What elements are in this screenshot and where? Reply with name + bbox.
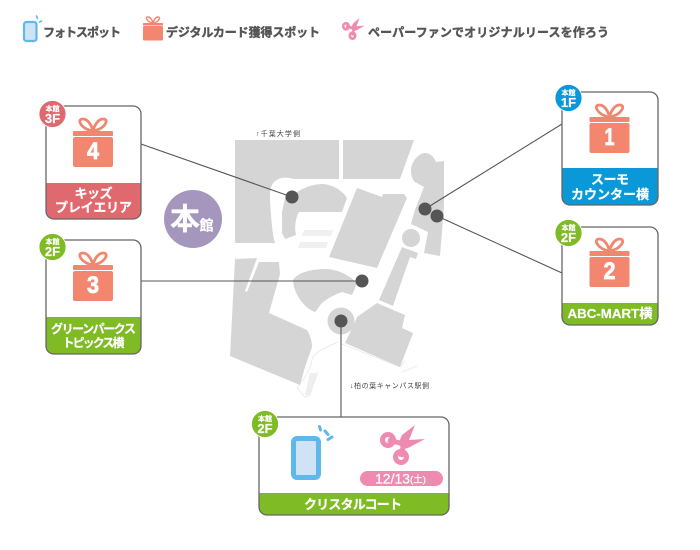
badge: main 2F: 本館 <box>46 237 60 246</box>
date pill <box>360 470 443 486</box>
label: green park topics: グリーンパークス <box>51 321 136 336</box>
icon: gift legend <box>143 17 163 40</box>
legend label: paper fan: ペーパーファンでオリジナルリースを作ろう <box>368 24 609 40</box>
legend label: digital card spot: デジタルカード獲得スポット <box>166 24 320 40</box>
label: crystal court: クリスタルコート <box>304 497 402 512</box>
badge: main 2F <box>39 234 66 260</box>
card: spot 4 kids play area <box>39 100 141 219</box>
badge: main 2F bottom: 2F <box>257 421 273 436</box>
date pill: (土) <box>410 474 426 486</box>
label: green park topics: トピックス横 <box>62 335 124 350</box>
label: green park topics <box>51 321 136 350</box>
map: east rotunda <box>402 229 420 247</box>
map: lower right block <box>345 303 413 367</box>
label: kids play area <box>55 186 132 215</box>
card: crystal court <box>252 410 449 515</box>
map: courtyard inner block <box>282 184 347 239</box>
badge: main 2F bottom: 本館 <box>258 414 272 423</box>
map: central building <box>329 188 407 268</box>
building badge: main hall: 館 <box>200 218 214 234</box>
badge: main 2F bottom <box>252 410 278 438</box>
icon: phone legend <box>24 16 42 41</box>
badge: main 1F <box>555 84 582 112</box>
map: crystal court circle <box>328 308 354 334</box>
badge: main 2F: 2F <box>45 244 60 259</box>
building badge: main hall <box>164 190 222 248</box>
label: zoomo counter: カウンター横 <box>571 187 649 202</box>
badge: main 1F: 1F <box>561 95 576 110</box>
label: kids play area: プレイエリア <box>55 200 132 215</box>
badge: main 2F right: 本館 <box>562 223 576 232</box>
map: long building <box>379 247 418 306</box>
badge: main 3F <box>39 100 66 128</box>
label: abc-mart: ABC-MART横 <box>568 306 652 321</box>
card: spot 1 zoomo <box>555 84 658 205</box>
legend label: photo spot: フォトスポット <box>43 26 121 40</box>
map: entrance hatch <box>305 373 318 395</box>
map: upper left block <box>235 140 339 243</box>
building badge: main hall: 本 <box>170 204 200 236</box>
icon: gift 4: 4 <box>87 138 100 165</box>
map: plaza outline <box>297 342 417 397</box>
map markers <box>286 190 444 328</box>
icon: scissors <box>382 425 425 462</box>
floor map <box>230 140 444 397</box>
badge: main 2F right <box>555 220 582 246</box>
label: zoomo counter: スーモ <box>591 172 629 187</box>
map: upper centre block <box>343 140 414 179</box>
card: spot 2 abc-mart <box>555 220 658 325</box>
label: kids play area: キッズ <box>74 186 112 201</box>
date pill: 12/13 <box>375 470 410 486</box>
icon: phone <box>294 426 332 478</box>
icon: scissors legend <box>343 18 364 39</box>
legend <box>24 16 609 41</box>
direction label south: ↓柏の葉キャンパス駅側 <box>350 381 429 390</box>
icon: gift 1: 1 <box>604 124 614 151</box>
badge: main 3F: 本館 <box>46 104 60 113</box>
map: east building <box>411 153 444 256</box>
icon: gift 2: 2 <box>604 258 616 285</box>
map: lower dome <box>293 269 357 312</box>
connector lines <box>141 124 562 417</box>
icon: gift 3: 3 <box>87 272 99 299</box>
map: lower left block <box>230 258 312 385</box>
badge: main 2F right: 2F <box>561 230 576 245</box>
card: spot 3 green park <box>39 234 141 354</box>
badge: main 1F: 本館 <box>562 88 576 97</box>
badge: main 3F: 3F <box>45 111 60 126</box>
map: light strips <box>298 230 333 248</box>
direction label north: ↑千葉大学側 <box>256 129 300 138</box>
label: zoomo counter <box>571 172 649 202</box>
